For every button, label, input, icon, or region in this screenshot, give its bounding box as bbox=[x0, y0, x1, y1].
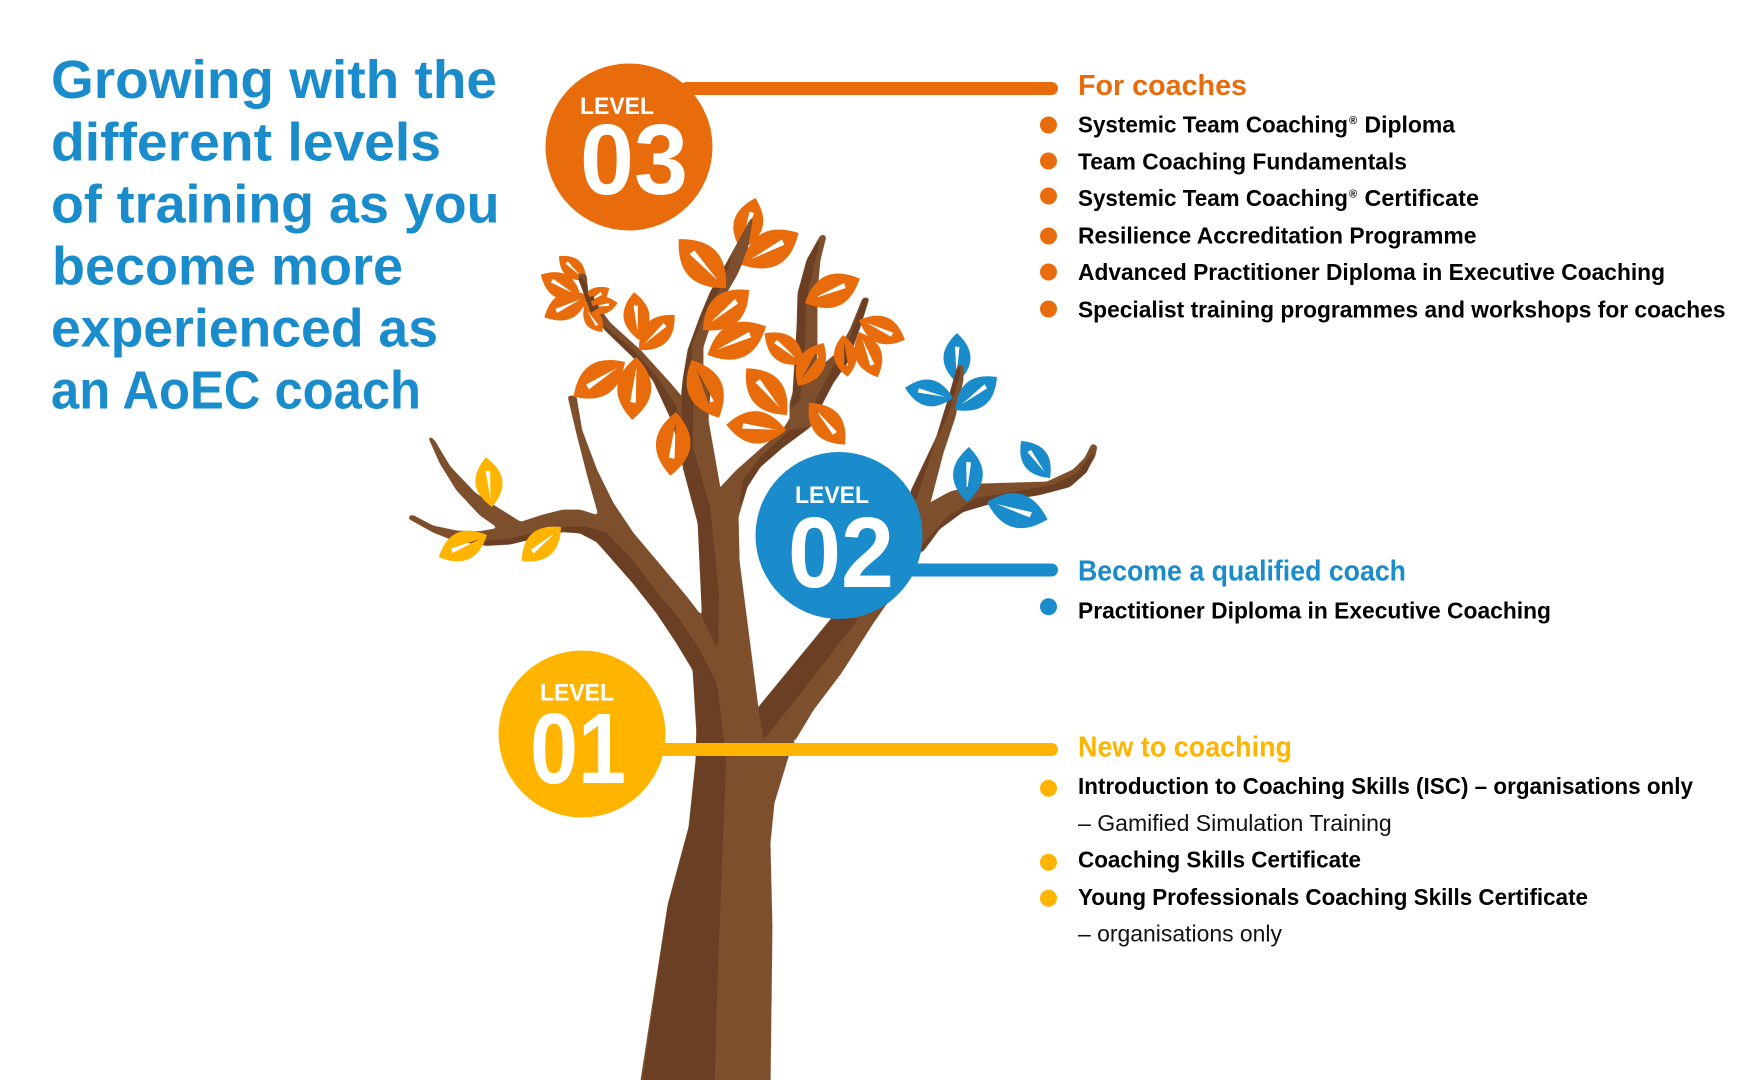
list: for coaches: Systemic Team Coaching bbox=[1078, 112, 1348, 138]
title: become more bbox=[52, 238, 403, 296]
list: new to coaching: – Gamified Simulation Training bbox=[1078, 810, 1392, 836]
badge: level 01: 01 bbox=[530, 693, 626, 805]
list: for coaches: Team Coaching Fundamentals bbox=[1078, 148, 1407, 174]
heading: for coaches: For coaches bbox=[1078, 70, 1247, 102]
title: different levels bbox=[51, 114, 441, 172]
title: an AoEC coach bbox=[51, 362, 421, 420]
list: for coaches: Certificate bbox=[1364, 185, 1479, 211]
title: Growing with the bbox=[51, 51, 497, 110]
heading: new to coaching: New to coaching bbox=[1078, 732, 1292, 764]
bullet: practitioner diploma bbox=[1040, 598, 1057, 615]
badge: level 01: LEVEL bbox=[540, 680, 614, 706]
connector bar: level 02 bbox=[880, 564, 1058, 576]
panel: new to coaching bbox=[1040, 732, 1693, 947]
list: for coaches bbox=[1078, 112, 1726, 322]
list: new to coaching: Coaching Skills Certificate bbox=[1078, 847, 1361, 873]
list: new to coaching: Young Professionals Coaching Skills Certificate bbox=[1078, 884, 1588, 910]
list: for coaches: Specialist training programmes and workshops for coaches bbox=[1078, 296, 1726, 322]
connector bar: level 01 bbox=[640, 743, 1058, 756]
list: new to coaching: Introduction to Coaching Skills (ISC) – organisations only bbox=[1078, 773, 1693, 799]
tree illustration bbox=[408, 194, 1097, 1080]
trunk and branches bbox=[408, 215, 1097, 1080]
title: of training as you bbox=[51, 176, 500, 234]
bullets: for coaches bbox=[1040, 116, 1057, 318]
list: for coaches: Diploma bbox=[1364, 112, 1455, 138]
heading: become a qualified coach: Become a qualified coach bbox=[1078, 556, 1406, 588]
connector bar: level 03 bbox=[680, 82, 1058, 95]
list: for coaches: Resilience Accreditation Programme bbox=[1078, 222, 1476, 248]
list: for coaches: Systemic Team Coaching bbox=[1078, 185, 1348, 211]
orange leaves bbox=[564, 218, 910, 477]
list: new to coaching: – organisations only bbox=[1078, 921, 1282, 947]
list: new to coaching bbox=[1078, 773, 1693, 947]
small twig over leaf cluster bbox=[580, 278, 598, 311]
badge: level 03: 03 bbox=[580, 104, 688, 216]
title bbox=[51, 51, 500, 420]
leaves behind branches bbox=[535, 194, 970, 383]
panel: become a qualified coach bbox=[1040, 556, 1551, 623]
list: for coaches: ® bbox=[1349, 188, 1357, 200]
title: experienced as bbox=[51, 300, 438, 358]
badge: level 03: LEVEL bbox=[580, 93, 654, 120]
blue leaves bbox=[902, 366, 1060, 536]
badge: level 01 bbox=[498, 650, 666, 818]
yellow leaves bbox=[433, 456, 570, 572]
badge: level 02 bbox=[756, 452, 922, 619]
list item: practitioner diploma: Practitioner Diploma in Executive Coaching bbox=[1078, 597, 1551, 623]
list: for coaches: Advanced Practitioner Diploma in Executive Coaching bbox=[1078, 259, 1665, 285]
list: for coaches: ® bbox=[1349, 115, 1357, 127]
badge: level 03 bbox=[546, 64, 712, 230]
badge: level 02: LEVEL bbox=[795, 482, 869, 509]
badge: level 02: 02 bbox=[788, 497, 894, 609]
panel: for coaches bbox=[1040, 70, 1726, 322]
bullets: new to coaching bbox=[1040, 780, 1057, 907]
